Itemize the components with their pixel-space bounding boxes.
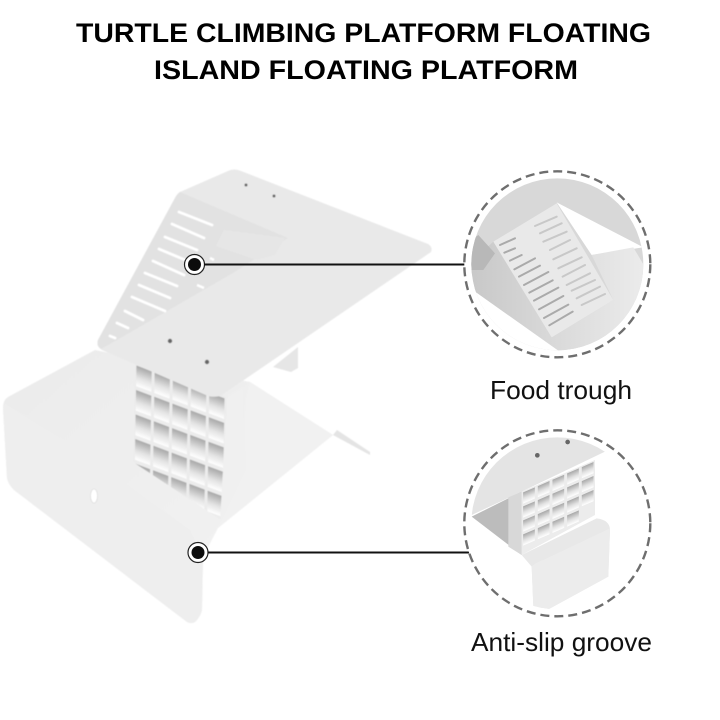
base panel [3, 350, 370, 623]
ramp with slots [97, 192, 288, 349]
title: TURTLE CLIMBING PLATFORM FLOATING [76, 18, 651, 48]
callout marker: food trough [184, 254, 467, 274]
title: ISLAND FLOATING PLATFORM [154, 55, 578, 85]
callout marker: anti-slip groove [188, 542, 470, 562]
grid column [134, 365, 225, 516]
base hole [90, 489, 98, 503]
detail circle: food trough [464, 171, 653, 363]
plate screws [168, 184, 276, 364]
title [76, 18, 651, 85]
detail circle: anti-slip groove [464, 430, 650, 616]
top plate [98, 170, 432, 397]
column side face [220, 388, 245, 522]
label: anti-slip groove: Anti-slip groove [471, 627, 652, 657]
rear support tab [273, 347, 298, 372]
label: food trough: Food trough [490, 375, 632, 405]
product photo: turtle platform [3, 170, 432, 623]
